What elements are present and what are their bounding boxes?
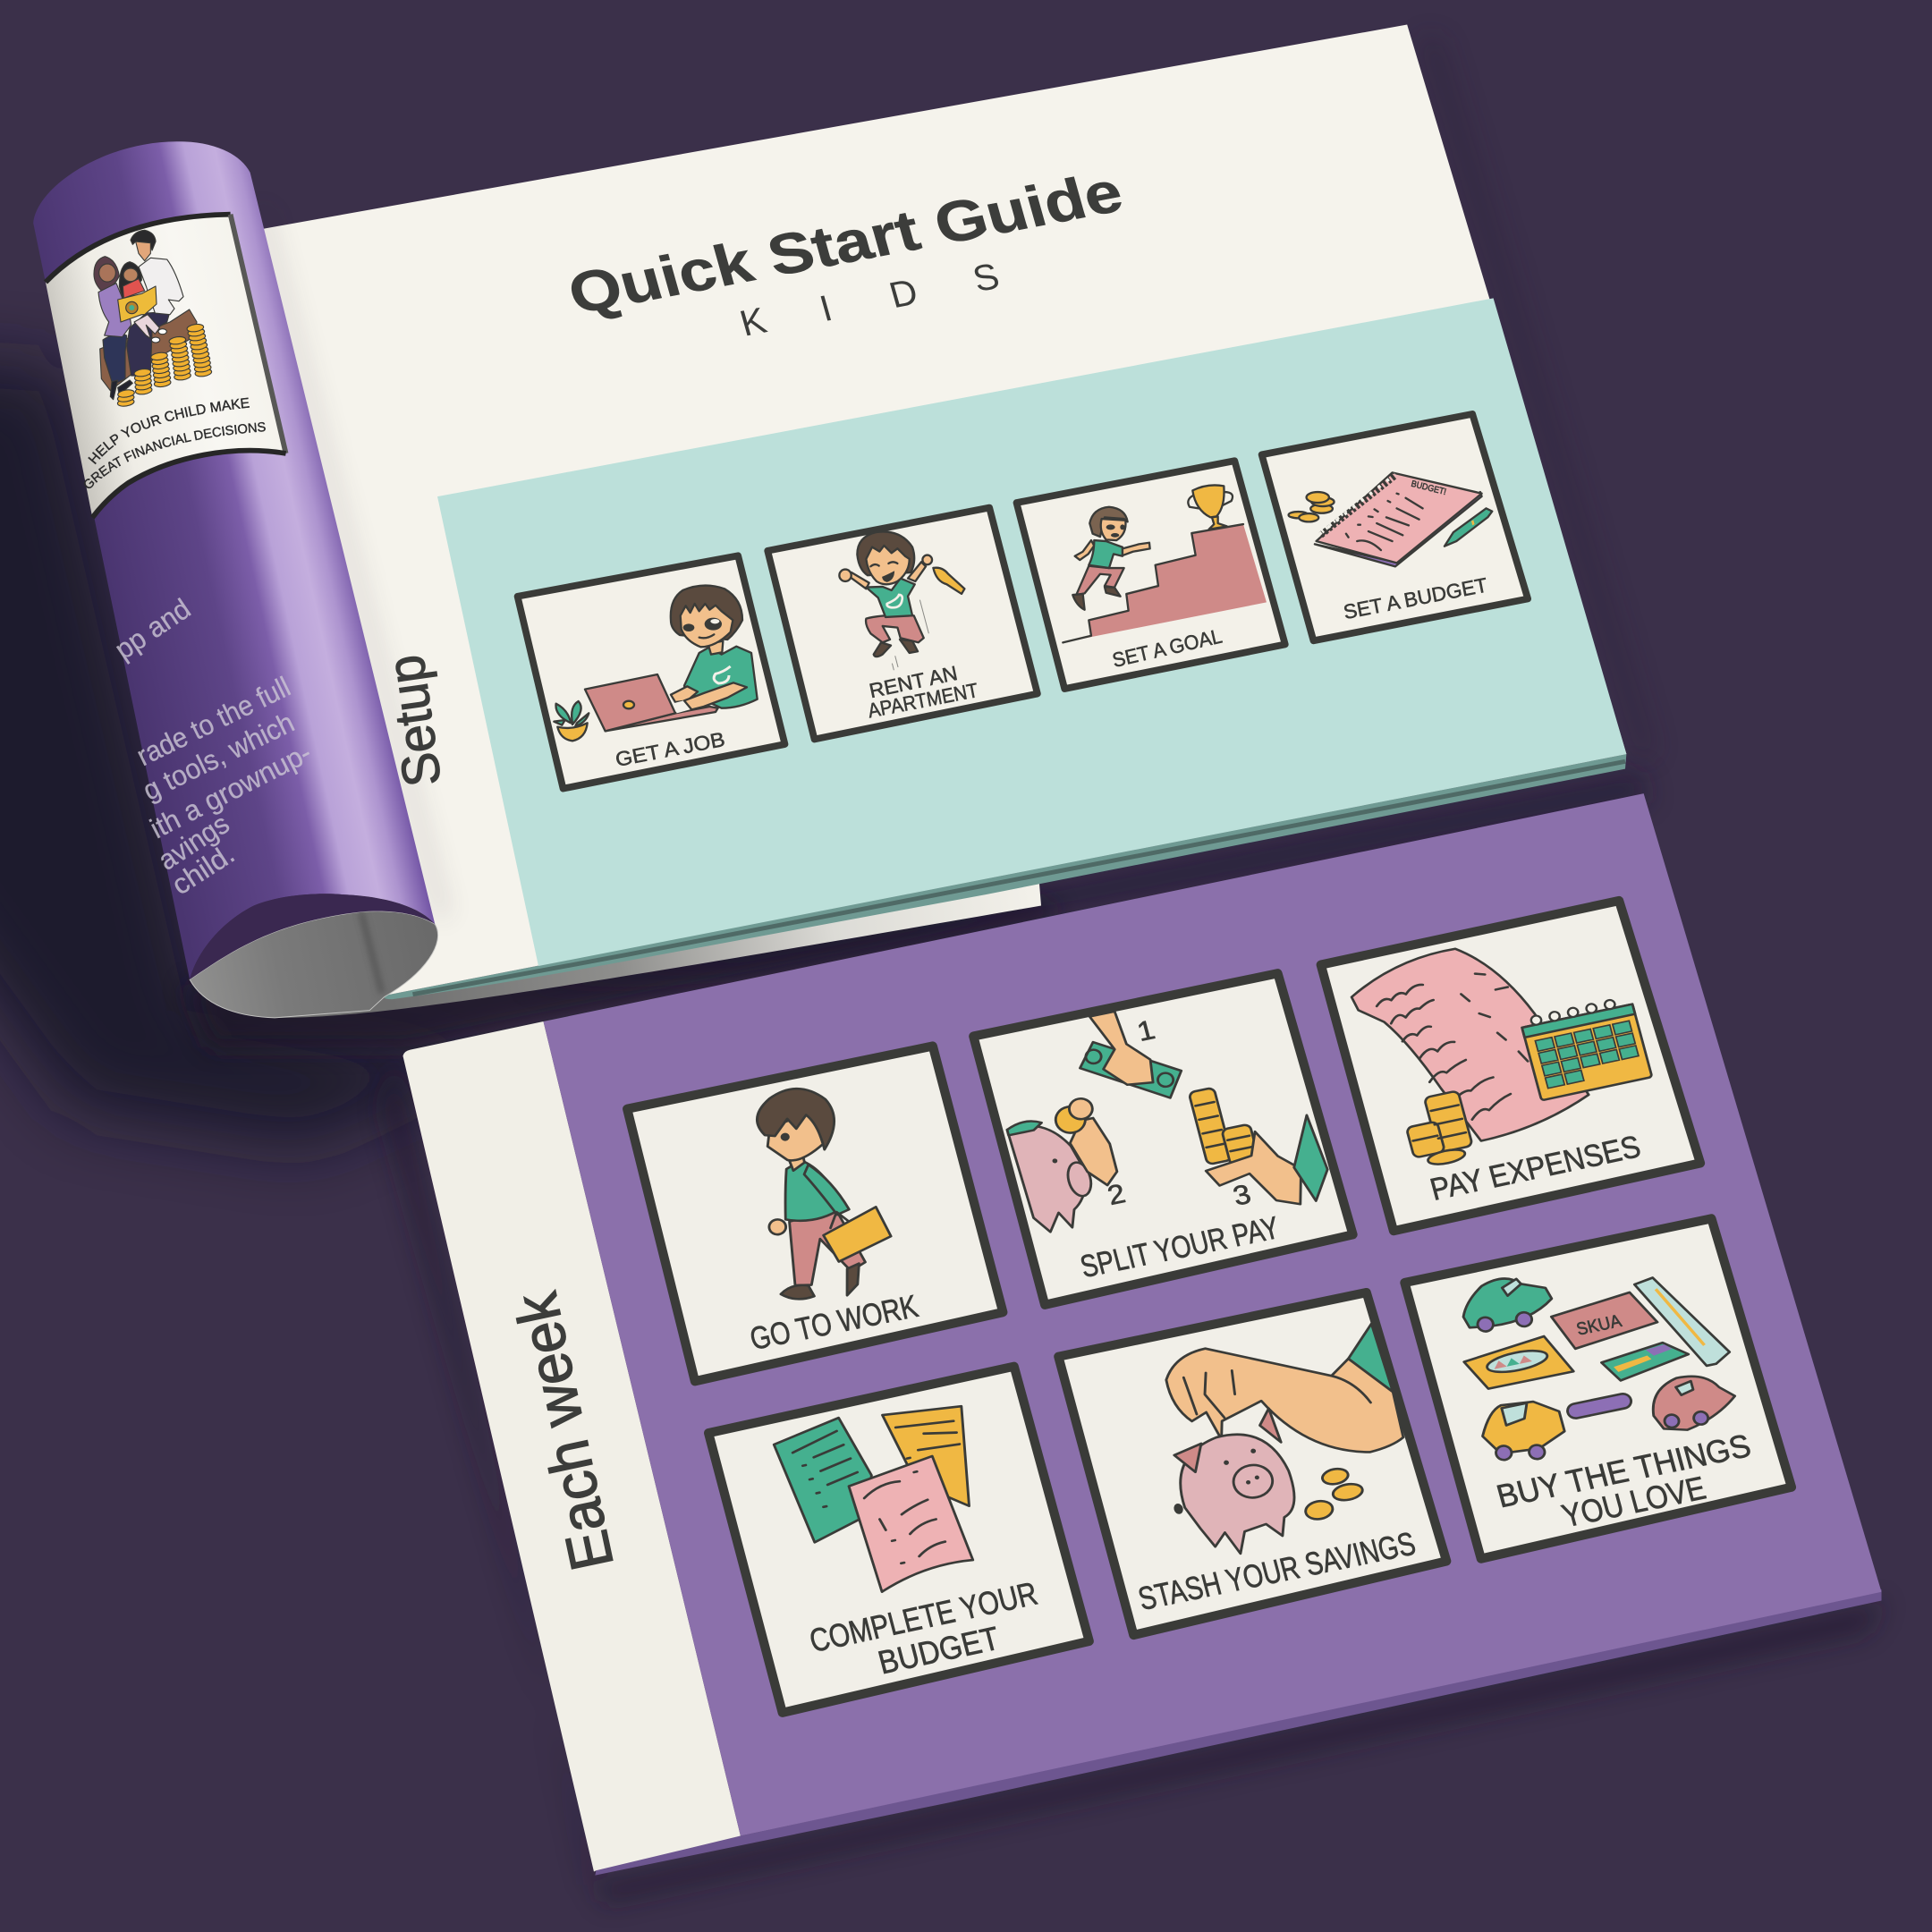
- page fold crease: [361, 911, 382, 993]
- page edges: [384, 754, 1626, 999]
- card: split your pay: [973, 973, 1353, 1305]
- numbers: 2: [1105, 1178, 1129, 1211]
- card: set a goal: [1016, 461, 1285, 689]
- cover caption: line one: HELP YOUR CHILD MAKE: [88, 397, 250, 465]
- back cover text: [109, 592, 317, 901]
- subtitle: kids: S: [969, 256, 1004, 300]
- illustration: running person: [1072, 507, 1150, 610]
- illustration: pen: [1445, 508, 1492, 547]
- illustration: calendar: [1520, 996, 1652, 1100]
- caption: STASH YOUR SAVINGS: [1134, 1525, 1419, 1618]
- coin stacks: [117, 323, 212, 407]
- subtitle: kids: D: [885, 271, 922, 316]
- illustration: green pack: [1599, 1338, 1691, 1384]
- card: go to work: [627, 1046, 1003, 1381]
- card: set a budget: [1262, 414, 1528, 640]
- illustration: stairs: [1063, 524, 1267, 642]
- numbers: 1: [1134, 1014, 1158, 1046]
- illustration: notebook: BUDGET!: [1410, 479, 1447, 497]
- card: buy the things you love: [1404, 1218, 1792, 1559]
- numbers: 3: [1230, 1179, 1254, 1211]
- caption: GO TO WORK: [746, 1288, 921, 1357]
- caption: line one: COMPLETE YOUR: [806, 1576, 1041, 1660]
- illustration: pink card: SKUA: [1574, 1311, 1623, 1339]
- heading: setup: Setup: [375, 651, 453, 791]
- illustration: coins: [1296, 1465, 1368, 1521]
- back cover text: rade to the full: [131, 670, 295, 772]
- card: rent an apartment: [767, 508, 1038, 740]
- illustration: long receipt: [1345, 929, 1595, 1159]
- illustration: coins: [1289, 492, 1335, 521]
- illustration: trophy: [1188, 485, 1233, 530]
- illustration: hand with cash: [1068, 1002, 1188, 1114]
- back cover text: avings: [152, 807, 235, 877]
- illustration: person at laptop: [585, 586, 758, 731]
- illustration: pink toy car: [1645, 1368, 1741, 1436]
- title: Quick Start Guide: [561, 158, 1130, 326]
- caption: SPLIT YOUR PAY: [1077, 1209, 1283, 1284]
- bottom booklet: each week: [402, 793, 1882, 1876]
- illustration: yellow toy car: [1476, 1394, 1571, 1469]
- teal panel: [437, 298, 1626, 966]
- cover card: [44, 211, 288, 519]
- caption: line one: BUY THE THINGS: [1493, 1428, 1755, 1515]
- illustration: piggy bank: [1154, 1408, 1308, 1564]
- caption: line two: BUDGET: [875, 1621, 1004, 1682]
- caption: line two: YOU LOVE: [1558, 1470, 1709, 1535]
- illustration: coin stacks: [1400, 1090, 1476, 1170]
- page edges: [595, 1589, 1882, 1876]
- fold interior: [190, 911, 438, 1018]
- caption: line one: RENT AN: [867, 661, 960, 702]
- subtitle: kids: I: [815, 288, 836, 329]
- cream page: [241, 25, 1626, 996]
- caption: SET A BUDGET: [1342, 572, 1489, 623]
- curled cover roll: [33, 141, 438, 1018]
- cream spine strip: [402, 1021, 741, 1871]
- purple panel: [544, 793, 1882, 1836]
- back cover text: pp and: [109, 592, 196, 665]
- subtitle: kids: [735, 256, 1004, 344]
- subtitle: kids: K: [735, 300, 771, 344]
- purple roll body: [33, 141, 435, 979]
- card: pay expenses: [1321, 901, 1700, 1231]
- illustration: jumping person with keys: [839, 531, 964, 670]
- cover caption: line two: GREAT FINANCIAL DECISIONS: [84, 422, 266, 488]
- illustration: budget papers: [771, 1392, 1003, 1606]
- top booklet: setup: [241, 25, 1626, 999]
- illustration: potted plant: [554, 701, 589, 741]
- illustration: notebook: [1315, 472, 1482, 566]
- caption: PAY EXPENSES: [1427, 1129, 1644, 1207]
- illustration: coin stacks and hand: [1185, 1070, 1335, 1221]
- illustration: piggy bank and coin: [1003, 1095, 1129, 1235]
- card: stash your savings: [1058, 1292, 1446, 1635]
- card: complete your budget: [708, 1367, 1089, 1713]
- illustration: hand and arm: [1160, 1314, 1407, 1488]
- illustration: purple pill: [1566, 1393, 1632, 1419]
- back cover text: child.: [165, 837, 240, 901]
- back cover text: g tools, which: [138, 706, 299, 807]
- illustration: pink card: [1549, 1289, 1660, 1352]
- caption: line two: APARTMENT: [866, 678, 980, 722]
- illustration: family with book and coins: [94, 230, 212, 407]
- heading: each week: Each week: [503, 1287, 627, 1576]
- roll rim: [190, 894, 435, 979]
- illustration: yellow crayon box: [1462, 1333, 1573, 1393]
- card: get a job: [518, 555, 785, 789]
- sheet under top booklet: [275, 876, 1041, 1018]
- illustration: green toy car: [1455, 1270, 1557, 1338]
- caption: GET A JOB: [614, 727, 726, 771]
- caption: SET A GOAL: [1110, 624, 1224, 672]
- illustration: teal tube: [1634, 1267, 1732, 1376]
- numbers: [1065, 1004, 1254, 1236]
- roll shadow on page: [261, 209, 444, 918]
- back cover text: ith a grownup-: [145, 736, 317, 844]
- illustration: person walking with briefcase: [733, 1077, 902, 1309]
